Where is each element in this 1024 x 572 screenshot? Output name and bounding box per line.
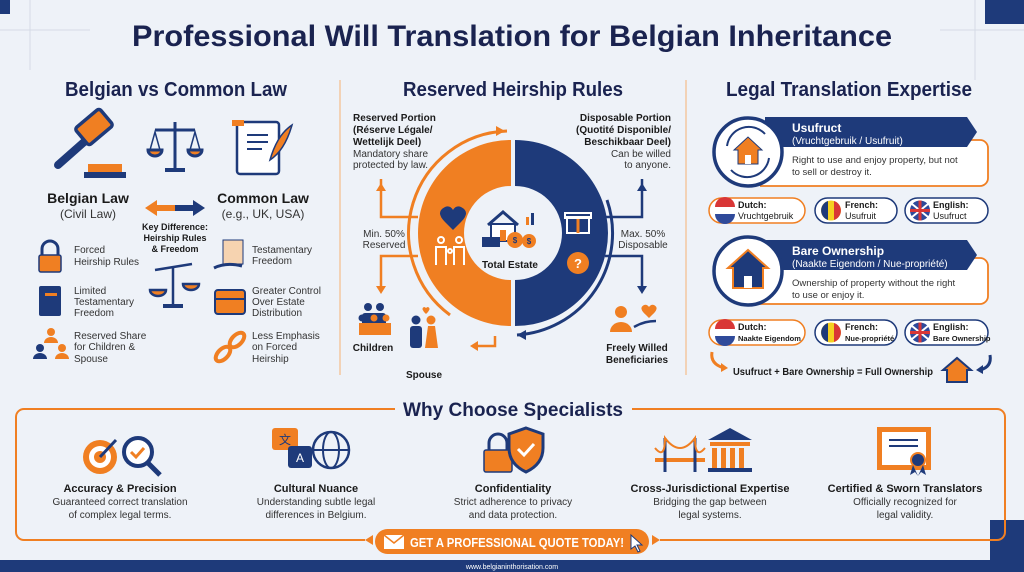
panel: Reserved Heirship Rules: Min. 50% (363, 229, 405, 240)
icon: house with cycle (714, 118, 782, 186)
text: reserved portion (353, 113, 436, 171)
card: bare ownership (714, 237, 988, 305)
heading: Belgian vs Common Law: Belgian vs Common Law (65, 79, 287, 101)
card: usufruct: (Vruchtgebruik / Usufruit) (792, 136, 903, 147)
pills: bare ownership translations (709, 319, 991, 346)
icon: beneficiaries (610, 305, 657, 332)
panel: Reserved Heirship Rules: Max. 50% (621, 229, 665, 240)
button: get a quote (365, 529, 660, 554)
icon: lock (39, 241, 61, 272)
arrow: double (145, 200, 205, 216)
panel: Legal Translation Expertise (709, 79, 991, 382)
item: cross-jurisdictional: Cross-Jurisdictional Expertise (631, 483, 789, 495)
list: Common law features: on Forced (252, 342, 297, 353)
pills: bare ownership translations: Dutch: (738, 322, 766, 332)
icon: children (358, 303, 391, 335)
panel: Reserved Heirship Rules (353, 79, 671, 381)
icon: total estate: $ (527, 237, 532, 246)
item: accuracy: of complex legal terms. (69, 510, 171, 521)
icon: small scales (150, 264, 199, 306)
list: Belgian law features: Spouse (74, 354, 108, 365)
item: cross-jurisdictional: legal systems. (678, 510, 742, 521)
text: reserved portion: (Réserve Légale/ (353, 125, 433, 136)
item: confidentiality: Confidentiality (475, 483, 552, 495)
item: confidentiality: and data protection. (469, 510, 557, 521)
icon: gavel (58, 108, 126, 178)
panel: Reserved Heirship Rules: Beneficiaries (606, 355, 669, 366)
pills: bare ownership translations: Naakte Eigendom (738, 334, 801, 343)
arrows: reserved branches (381, 179, 495, 346)
panel: Reserved Heirship Rules: Disposable (618, 240, 668, 251)
text: Belgian Law: Belgian Law (47, 190, 129, 206)
text: key difference: & Freedom (151, 244, 199, 254)
card: usufruct (714, 117, 988, 186)
item: cross-jurisdictional (631, 428, 789, 521)
equation: full ownership: Usufruct + Bare Ownership = Full Ownership (733, 366, 933, 378)
title: Professional Will Translation for Belgian Inheritance (132, 20, 892, 53)
heading: Why Choose Specialists: Why Choose Specialists (403, 400, 623, 421)
list: Belgian law features: Heirship Rules (74, 257, 139, 268)
text: key difference (142, 222, 208, 254)
item: cultural nuance: Cultural Nuance (274, 483, 358, 495)
text: disposable portion: (Quotité Disponible/ (576, 125, 671, 136)
item: cross-jurisdictional: Bridging the gap between (653, 497, 767, 508)
icon: spouse (410, 307, 438, 348)
icon: heart and family (436, 206, 466, 265)
list: Common law features (213, 240, 321, 365)
card: bare ownership: Ownership of property without the right (792, 278, 956, 289)
icon: people (33, 328, 69, 359)
list: Belgian law features: for Children & (74, 342, 135, 353)
list: Belgian law features (33, 241, 147, 365)
panel: Belgian vs Common Law: (Civil Law) (60, 207, 116, 221)
chart: estate donut (409, 126, 613, 340)
card: usufruct: to sell or destroy it. (792, 167, 872, 178)
pills: bare ownership translations: French: (845, 322, 878, 332)
text: key difference: Key Difference: (142, 222, 208, 232)
icon: total estate: $ (513, 236, 518, 245)
pills: usufruct translations: French: (845, 200, 878, 210)
text: reserved portion: Reserved Portion (353, 113, 436, 124)
list: Common law features: Less Emphasis (252, 331, 320, 342)
item: certified: legal validity. (877, 510, 933, 521)
list: Common law features: Heirship (252, 354, 289, 365)
item: certified (828, 427, 982, 521)
card: bare ownership: to use or enjoy it. (792, 290, 864, 301)
icon: house (714, 237, 782, 305)
panel: Reserved Heirship Rules: Children (353, 343, 393, 354)
text: disposable portion: Can be willed (611, 149, 671, 160)
list: Belgian law features: Freedom (74, 308, 114, 319)
list: Belgian law features: Reserved Share (74, 331, 147, 342)
list: Common law features: Distribution (252, 308, 302, 319)
list: Common law features: Freedom (252, 256, 292, 267)
footer (0, 560, 1024, 572)
panel: Belgian vs Common Law (33, 79, 321, 365)
item: cultural nuance (257, 428, 375, 521)
list: Common law features: Testamentary (252, 245, 312, 256)
text: disposable portion: to anyone. (624, 160, 671, 171)
text: key difference: Heirship Rules (143, 233, 207, 243)
list: Belgian law features: Limited (74, 286, 106, 297)
panel: Reserved Heirship Rules: Spouse (406, 370, 442, 381)
item: confidentiality: Strict adherence to privacy (454, 497, 572, 508)
icon: notebook (39, 286, 61, 316)
pills: bare ownership translations: English: (933, 322, 969, 332)
item: accuracy: Guaranteed correct translation (52, 497, 188, 508)
icon: scales (148, 122, 202, 170)
item: confidentiality (454, 428, 572, 521)
card: usufruct: Usufruct (792, 121, 841, 135)
text: disposable portion: Disposable Portion (580, 113, 671, 124)
panel: Reserved Heirship Rules: Reserved (363, 240, 405, 251)
heading: Legal Translation Expertise: Legal Translation Expertise (726, 79, 972, 101)
icon: will (214, 240, 243, 268)
panel: Why Choose Specialists (16, 400, 1005, 554)
item: accuracy (52, 438, 188, 521)
arrows: disposable branches (605, 179, 642, 291)
equation: full ownership (712, 352, 990, 382)
text: reserved portion: protected by law. (353, 160, 428, 171)
icon: chest (215, 290, 245, 314)
pills: usufruct translations: Usufruct (933, 211, 967, 221)
icon: total estate (482, 212, 536, 248)
list: Common law features: Over Estate (252, 297, 305, 308)
item: cultural nuance: differences in Belgium. (266, 510, 366, 521)
text: reserved portion: Wettelijk Deel) (353, 137, 421, 148)
text: Common Law: Common Law (217, 190, 309, 206)
icon: gift and question: ? (574, 256, 582, 271)
item: certified: Certified & Sworn Translators (828, 483, 982, 495)
item: cultural nuance: A (296, 451, 304, 465)
card: bare ownership: (Naakte Eigendom / Nue-propriété) (792, 259, 948, 270)
heading: Reserved Heirship Rules: Reserved Heirship Rules (403, 79, 623, 101)
item: cultural nuance: 文 (279, 432, 291, 447)
card: usufruct: Right to use and enjoy property, but not (792, 155, 958, 166)
button: get a quote: GET A PROFESSIONAL QUOTE TODAY! (410, 536, 624, 550)
pills: usufruct translations: Vruchtgebruik (738, 211, 794, 221)
icon: broken chain (213, 330, 247, 364)
text: disposable portion: Beschikbaar Deel) (584, 137, 671, 148)
pills: bare ownership translations: Nue-propriété (845, 334, 894, 343)
item: cultural nuance: Understanding subtle legal (257, 497, 375, 508)
icon: gift and question (565, 213, 591, 274)
item: accuracy: Accuracy & Precision (63, 483, 177, 495)
pills: usufruct translations: Dutch: (738, 200, 766, 210)
footer: www.belgianinthorisation.com (465, 564, 558, 571)
panel: Belgian vs Common Law: (e.g., UK, USA) (222, 207, 304, 221)
pills: usufruct translations (709, 197, 988, 224)
list: Belgian law features: Testamentary (74, 297, 134, 308)
item: certified: Officially recognized for (853, 497, 958, 508)
panel: Reserved Heirship Rules: Freely Willed (606, 343, 668, 354)
pills: usufruct translations: English: (933, 200, 969, 210)
chart: estate donut: Total Estate (482, 260, 538, 271)
icon: scroll with quill (232, 120, 292, 174)
text: reserved portion: Mandatory share (353, 149, 428, 160)
pills: bare ownership translations: Bare Ownership (933, 334, 991, 343)
list: Common law features: Greater Control (252, 286, 321, 297)
list: Belgian law features: Forced (74, 245, 105, 256)
text: disposable portion (576, 113, 671, 171)
pills: usufruct translations: Usufruit (845, 211, 877, 221)
card: bare ownership: Bare Ownership (792, 244, 884, 258)
